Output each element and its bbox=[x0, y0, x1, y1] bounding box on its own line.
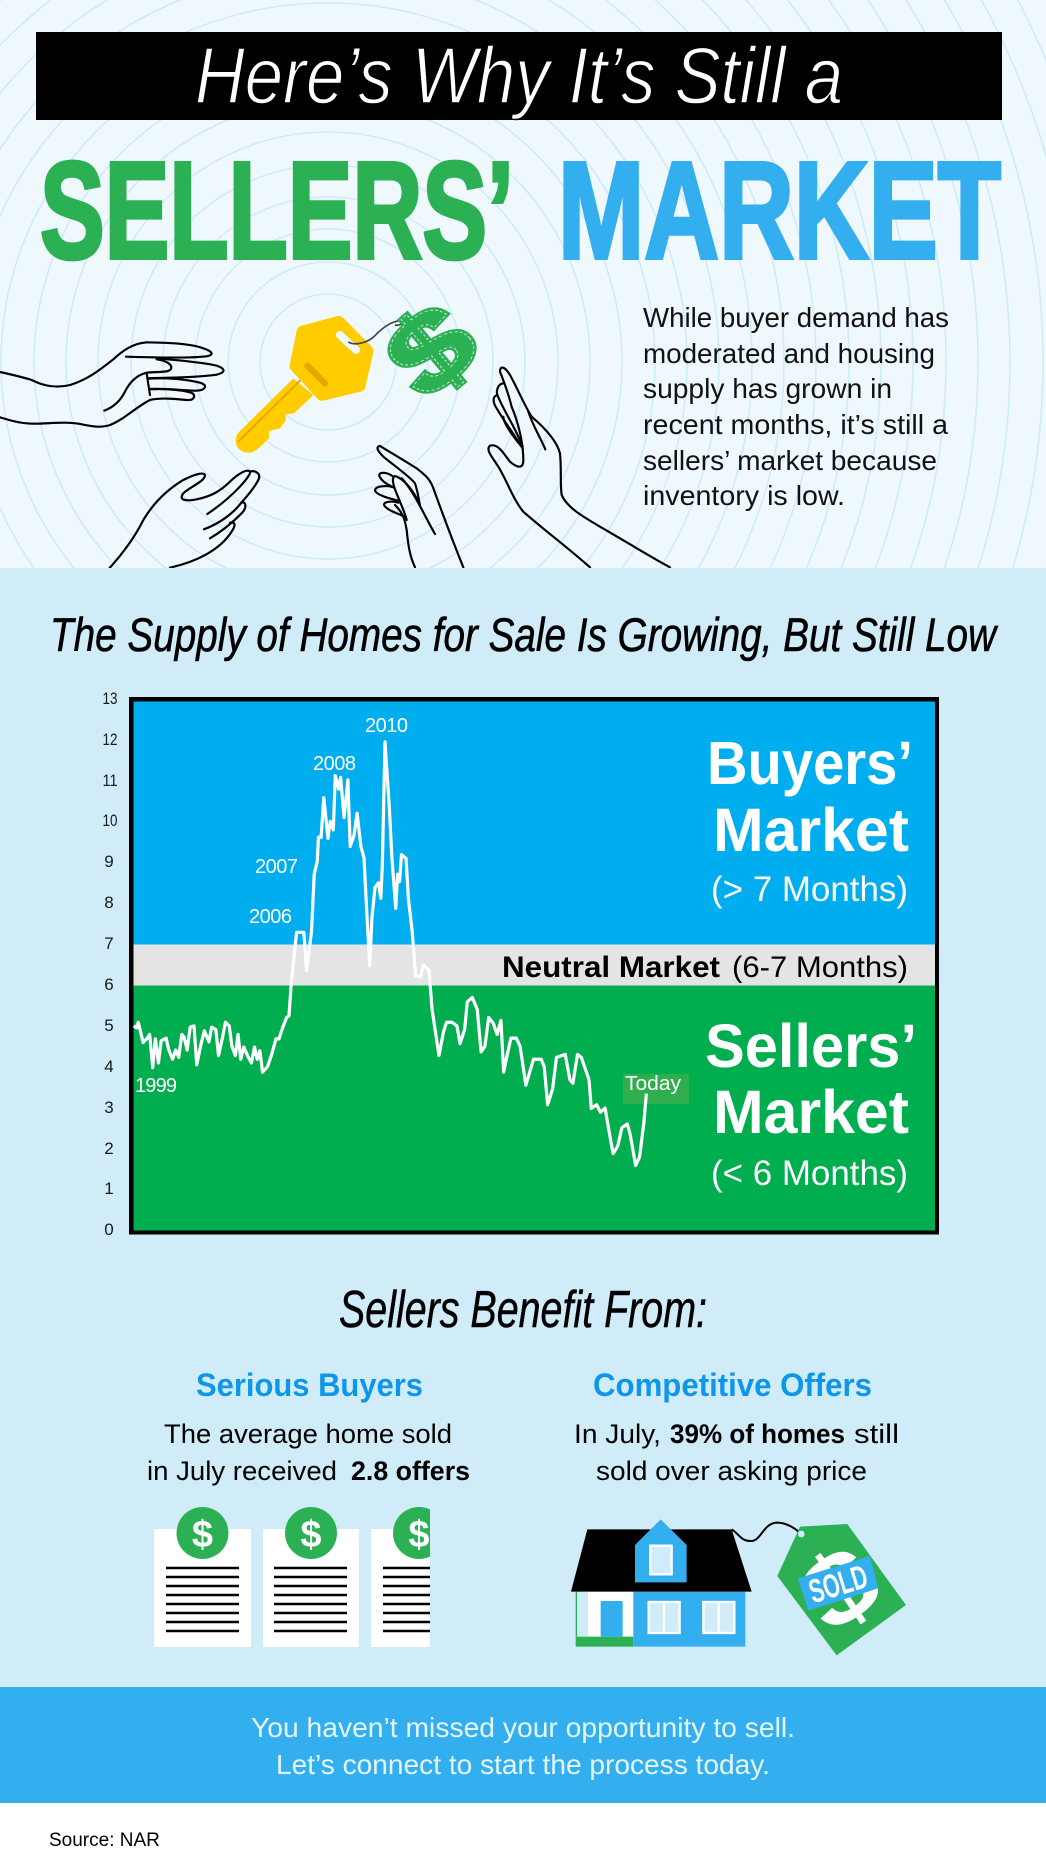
icon: sold tag: $ bbox=[780, 1522, 900, 1654]
today highlight bbox=[623, 1074, 689, 1104]
icon: sold tag: SOLD bbox=[805, 1558, 872, 1611]
column: serious buyers bbox=[147, 1367, 470, 1486]
label: buyers' market bbox=[707, 729, 913, 909]
label: sellers' market bbox=[705, 1012, 917, 1193]
heading: sellers benefit from: Sellers Benefit From: bbox=[339, 1281, 707, 1339]
y axis labels bbox=[102, 689, 118, 1239]
icon: sold tag bbox=[732, 1522, 906, 1655]
label: neutral market: (6-7 Months) bbox=[732, 951, 908, 984]
icon: dollar sign tag bbox=[387, 307, 477, 394]
y axis labels: 6 bbox=[104, 975, 114, 994]
y axis labels: 4 bbox=[104, 1057, 114, 1076]
label: sellers' market: (< 6 Months) bbox=[711, 1154, 908, 1193]
intro paragraph: While buyer demand has bbox=[643, 302, 949, 333]
call to action band: You haven’t missed your opportunity to sell. bbox=[251, 1712, 795, 1743]
call to action band bbox=[0, 1687, 1046, 1803]
column: serious buyers: in July received bbox=[147, 1456, 337, 1486]
column: competitive offers bbox=[574, 1367, 899, 1486]
icon: house bbox=[571, 1519, 752, 1647]
year labels: 2007 bbox=[255, 856, 298, 878]
icon: key bbox=[236, 316, 402, 453]
icon: offer document 3 bbox=[371, 1507, 430, 1647]
column: serious buyers: Serious Buyers bbox=[196, 1367, 423, 1403]
heading: sellers': SELLERS’ bbox=[40, 134, 514, 288]
icon: hand right bbox=[488, 368, 670, 567]
y axis labels: 5 bbox=[104, 1016, 114, 1035]
label: sellers' market: Sellers’ bbox=[705, 1012, 917, 1080]
intro paragraph: sellers’ market because bbox=[643, 445, 937, 476]
y axis labels: 9 bbox=[104, 852, 114, 871]
y axis labels: 11 bbox=[102, 771, 118, 790]
title banner: Here’s Why It’s Still a bbox=[195, 31, 843, 120]
column: competitive offers: In July, bbox=[574, 1419, 661, 1449]
year labels bbox=[135, 715, 681, 1097]
column: competitive offers: Competitive Offers bbox=[593, 1367, 872, 1403]
year labels: 2006 bbox=[249, 906, 292, 928]
icon: hand upper left bbox=[0, 342, 224, 427]
column: serious buyers: The average home sold bbox=[164, 1419, 452, 1449]
y axis labels: 8 bbox=[104, 893, 114, 912]
label: buyers' market: Market bbox=[713, 796, 909, 864]
year labels: Today bbox=[625, 1073, 681, 1095]
y axis labels: 7 bbox=[104, 934, 114, 953]
y axis labels: 3 bbox=[104, 1098, 114, 1117]
intro paragraph: supply has grown in bbox=[643, 373, 892, 404]
year labels: 1999 bbox=[135, 1075, 177, 1097]
source: Source: NAR bbox=[49, 1830, 160, 1851]
panel: supply section background bbox=[0, 568, 1046, 1687]
y axis labels: 2 bbox=[104, 1139, 114, 1158]
year labels: 2010 bbox=[365, 715, 408, 737]
icon: offer document 2: $ bbox=[300, 1514, 322, 1556]
data line bbox=[134, 742, 646, 1165]
panel: hero bbox=[0, 0, 1046, 568]
icon: dollar sign tag: $ bbox=[363, 279, 500, 422]
intro paragraph bbox=[643, 302, 949, 511]
intro paragraph: inventory is low. bbox=[643, 480, 845, 511]
chart: months of supply bbox=[129, 697, 939, 1234]
y axis labels: 1 bbox=[104, 1179, 114, 1198]
y axis labels: 10 bbox=[102, 811, 118, 830]
label: buyers' market: (> 7 Months) bbox=[711, 870, 908, 909]
label: buyers' market: Buyers’ bbox=[707, 729, 913, 797]
y axis labels: 12 bbox=[102, 730, 118, 749]
column: competitive offers: still bbox=[854, 1419, 899, 1449]
column: competitive offers: 39% of homes bbox=[670, 1419, 845, 1449]
icon: offer document 2 bbox=[263, 1507, 359, 1647]
y axis labels: 13 bbox=[102, 689, 118, 708]
icon: hand lower left bbox=[109, 471, 259, 568]
year labels: 2008 bbox=[313, 753, 356, 775]
call to action band: Let’s connect to start the process today. bbox=[276, 1749, 770, 1780]
column: competitive offers: sold over asking price bbox=[596, 1456, 867, 1486]
intro paragraph: moderated and housing bbox=[643, 338, 935, 369]
icon: offer document 1 bbox=[154, 1507, 251, 1647]
icon: offer document 1: $ bbox=[192, 1514, 213, 1556]
icon: dollar sign tag: $ bbox=[363, 279, 500, 422]
label: sellers' market: Market bbox=[713, 1078, 909, 1146]
column: serious buyers: 2.8 offers bbox=[351, 1456, 470, 1486]
label: neutral market bbox=[502, 951, 908, 984]
icon: hand lower middle bbox=[375, 446, 463, 567]
label: neutral market: Neutral Market bbox=[502, 951, 720, 984]
intro paragraph: recent months, it’s still a bbox=[643, 409, 948, 440]
y axis labels: 0 bbox=[104, 1220, 114, 1239]
icon: offer document 3: $ bbox=[408, 1514, 430, 1556]
